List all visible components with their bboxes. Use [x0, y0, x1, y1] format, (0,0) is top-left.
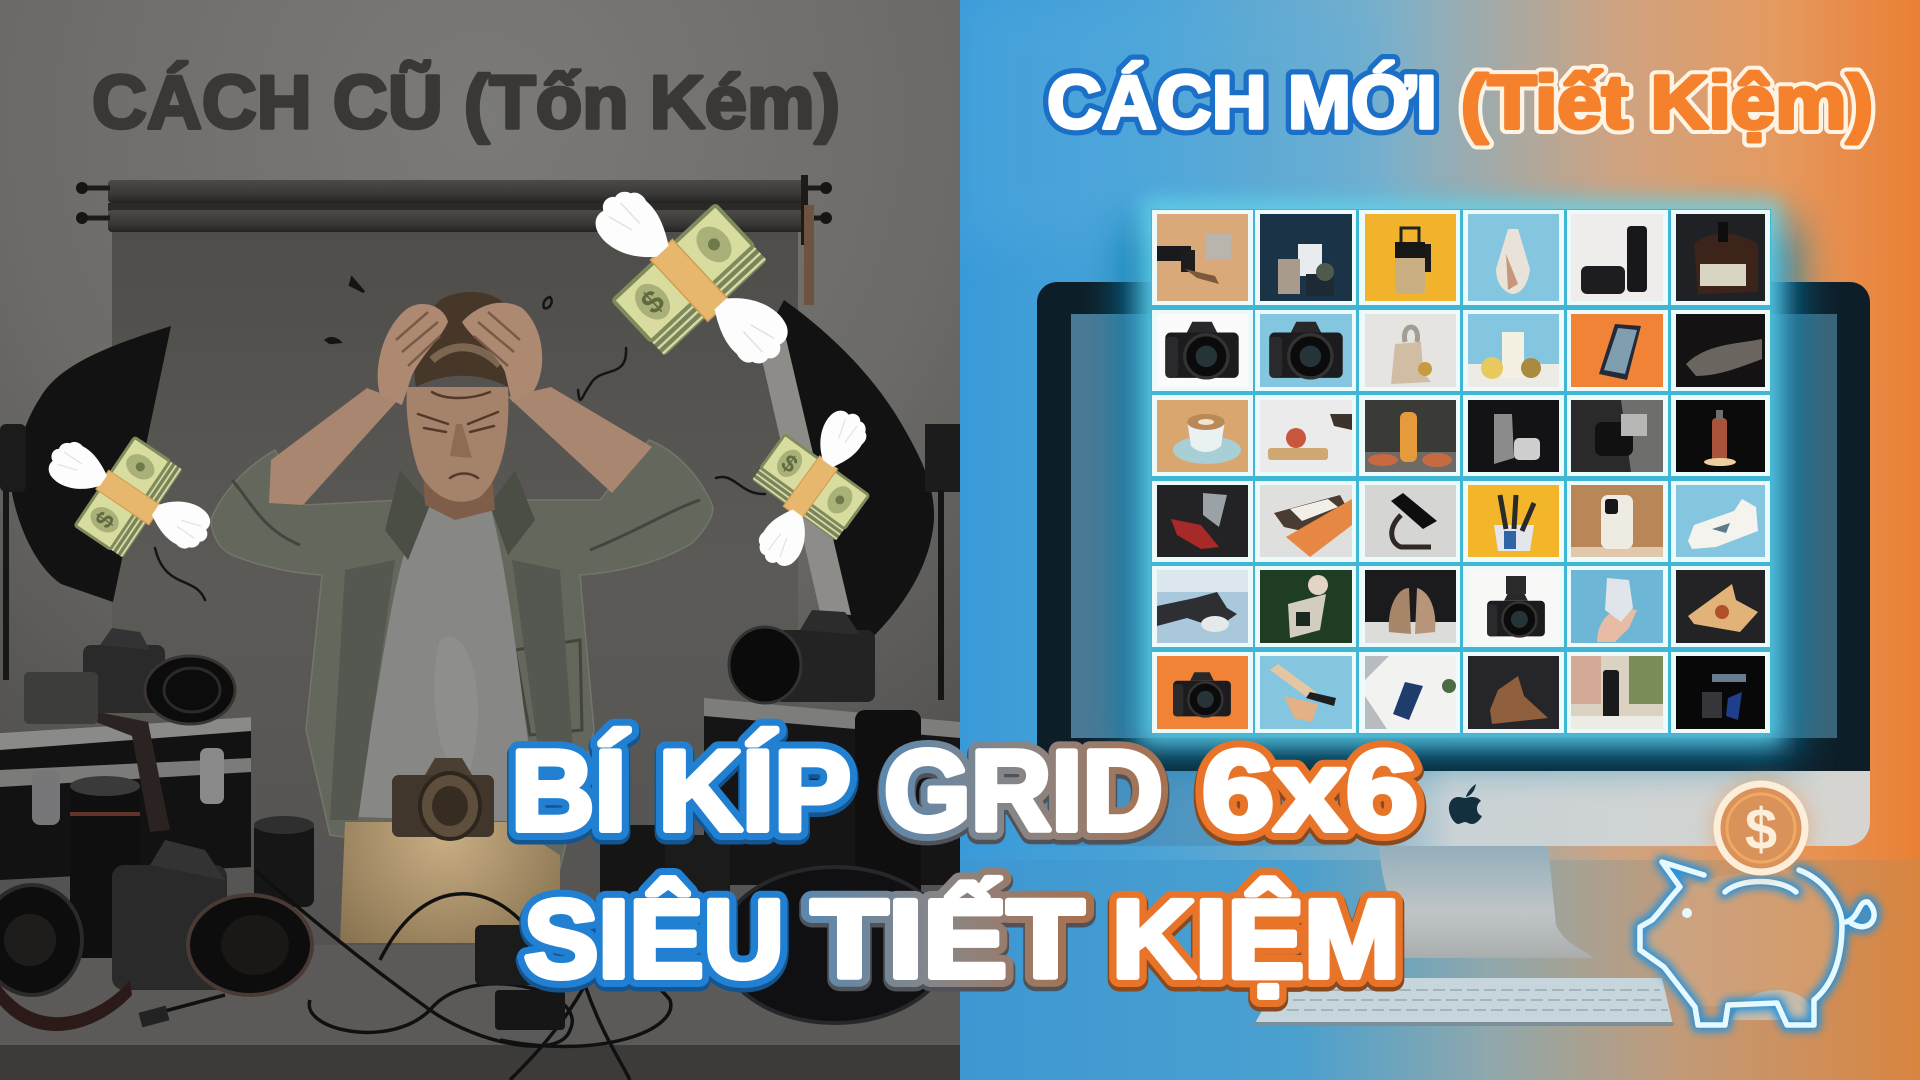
heading: new way: CÁCH MỚI	[1047, 60, 1437, 144]
hero camera on box	[392, 758, 494, 839]
title line 2: KIỆM: KIỆM	[1112, 878, 1400, 1001]
money with wings top	[560, 148, 819, 412]
usb plug	[139, 1006, 169, 1027]
hair	[414, 292, 515, 387]
title line 1: GRID: GRID	[884, 731, 1163, 858]
shirt body	[211, 440, 713, 868]
right equipment	[475, 610, 960, 1030]
front cameras	[0, 840, 312, 1031]
equipment case left	[0, 712, 251, 880]
title line 2: SIÊU: SIÊU	[524, 881, 784, 1004]
row 3	[1157, 400, 1765, 472]
grid halo	[1141, 199, 1781, 744]
neck and face	[422, 455, 495, 520]
title line 1: BÍ KÍP: BÍ KÍP	[511, 731, 851, 858]
cables	[150, 870, 671, 1080]
top blue highlight	[980, 18, 1370, 212]
piggy bank neon icon	[1640, 862, 1874, 1025]
heading: new way: (Tiết Kiệm)	[1461, 60, 1873, 144]
title line 1: BÍ KÍP: BÍ KÍP	[511, 728, 851, 855]
hands	[378, 304, 448, 405]
row 1	[1157, 214, 1765, 301]
table	[0, 945, 960, 1080]
money with wings left	[26, 404, 231, 590]
t-shirt	[355, 505, 540, 822]
imac monitor	[1037, 282, 1870, 846]
title line 2: KIỆM: KIỆM	[1112, 878, 1400, 1001]
title line 1: GRID: GRID	[884, 728, 1163, 855]
keyboard	[1254, 978, 1674, 1026]
main title	[511, 728, 1418, 1004]
title line 2: SIÊU: SIÊU	[524, 878, 784, 1001]
row 6	[1157, 656, 1765, 729]
squiggle lines and sweat drops	[155, 278, 765, 600]
row 5	[1157, 570, 1765, 643]
title line 1: 6x6: 6x6	[1202, 728, 1418, 855]
money with wings right	[719, 388, 903, 586]
backdrop rollers	[76, 175, 832, 305]
title line 2: SIÊU: SIÊU	[524, 878, 784, 1001]
heading: new way	[1047, 60, 1873, 144]
screen glow	[1125, 225, 1795, 755]
title line 2: TIẾT: TIẾT	[811, 878, 1084, 1001]
title line 1: GRID: GRID	[884, 728, 1163, 855]
heading: old way: CÁCH CŨ (Tốn Kém)	[92, 60, 840, 144]
coin icon	[1713, 780, 1809, 876]
apple logo	[1449, 784, 1482, 824]
man stressed	[211, 292, 713, 868]
coin icon: $	[1745, 797, 1777, 862]
standing lenses	[70, 776, 314, 958]
title line 2: TIẾT: TIẾT	[811, 878, 1084, 1001]
backdrop paper	[112, 228, 798, 928]
heading: new way: (Tiết Kiệm)	[1461, 60, 1873, 144]
imac stand	[1379, 845, 1594, 958]
title line 1: BÍ KÍP: BÍ KÍP	[511, 728, 851, 855]
camera on case	[24, 628, 235, 724]
title line 2: KIỆM: KIỆM	[1112, 881, 1400, 1004]
photo grid 6x6	[1151, 209, 1771, 734]
cardboard box	[340, 822, 560, 943]
forearms	[269, 388, 398, 505]
right softbox and light	[759, 300, 960, 700]
heading: new way: CÁCH MỚI	[1047, 60, 1437, 144]
shirt collar and placket	[385, 470, 535, 560]
title line 1: 6x6: 6x6	[1202, 731, 1418, 858]
left softbox and light	[0, 326, 171, 680]
panel: new way (right)	[960, 0, 1920, 1080]
row 2	[1157, 314, 1765, 387]
row 4	[1157, 485, 1765, 557]
panel: old way (left)	[0, 0, 960, 1080]
title line 2: TIẾT: TIẾT	[811, 881, 1084, 1004]
title line 1: 6x6: 6x6	[1202, 728, 1418, 855]
